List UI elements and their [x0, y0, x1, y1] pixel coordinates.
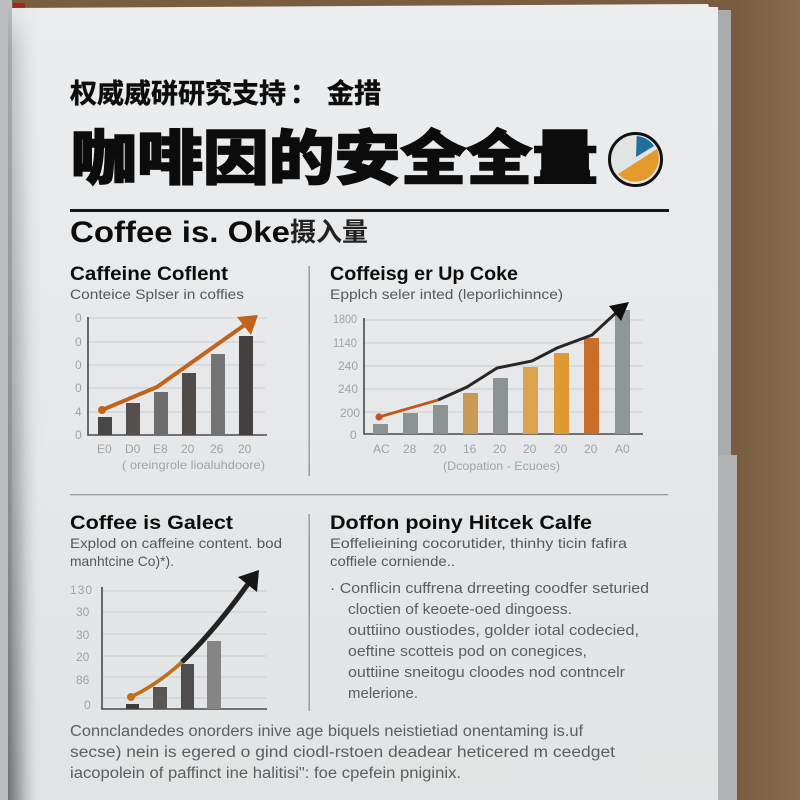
- bullet list: cloctien of keoete-oed dingoess.: [348, 602, 572, 618]
- subtitle: 摄入量: [290, 217, 368, 247]
- panel description: [70, 535, 282, 569]
- horizontal divider: [70, 494, 668, 495]
- panel description: Eoffelieining cocorutider, thinhy ticin fafira: [330, 535, 627, 551]
- panel heading: Caffeine Coflent: [70, 264, 229, 285]
- line and bar chart: galect: 30: [76, 605, 90, 619]
- bar chart: coffee up: 240: [338, 359, 358, 373]
- bullet list: [330, 581, 649, 702]
- bar chart: coffee up: 28: [403, 442, 417, 456]
- arrow: rising curve: [127, 570, 259, 701]
- line and bar chart: galect: 0: [84, 698, 91, 712]
- bullet list: oeftine scotteis pod on conegices,: [348, 644, 587, 660]
- bar chart: caffeine content: 26: [210, 442, 224, 456]
- footer paragraph: iacopolein of paffinct ine halitisi": foe cpefein pniginix.: [70, 765, 461, 782]
- header line: 金措: [327, 79, 381, 109]
- panel description: Conteice Splser in coffies: [70, 286, 244, 302]
- panel: coffee is galect: [70, 513, 282, 712]
- footer paragraph: secse) nein is egered o gind ciodl-rstoen deadear heticered m ceedget: [70, 744, 616, 761]
- footer paragraph: Connclandedes onorders inive age biquels neistietiad onentaming is.uf: [70, 723, 584, 740]
- arrow: trend line: [375, 302, 629, 421]
- arrow: orange trend: [98, 315, 258, 414]
- bar chart: caffeine content: 0: [75, 311, 82, 325]
- vertical divider: top: [308, 266, 310, 476]
- line and bar chart: galect: 20: [76, 650, 90, 664]
- bar chart: coffee up: 240: [338, 382, 358, 396]
- bullet list: melerione.: [348, 686, 418, 702]
- bar chart: coffee up: [333, 302, 643, 473]
- line and bar chart: galect: 86: [76, 673, 90, 687]
- bar chart: coffee up: 20: [493, 442, 507, 456]
- bar chart: coffee up: 20: [584, 442, 598, 456]
- bar chart: caffeine content: 0: [75, 428, 82, 442]
- line and bar chart: galect: 30: [76, 628, 90, 642]
- bar chart: coffee up: 20: [523, 442, 537, 456]
- bar chart: coffee up: (Dcopation - Ecuoes): [443, 459, 560, 473]
- title: 咖啡因的安全全量: [71, 111, 598, 196]
- bar chart: caffeine content: ( oreingrole lioaluhdoore): [122, 458, 265, 472]
- bar chart: caffeine content: 0: [75, 381, 82, 395]
- bar chart: coffee up: 20: [433, 442, 447, 456]
- bar chart: caffeine content: E0: [97, 442, 112, 456]
- bar chart: coffee up: 0: [350, 428, 357, 442]
- header line: 权威威硑研究支持: [70, 79, 286, 109]
- bar chart: coffee up: 20: [554, 442, 568, 456]
- bullet list: outtiino oustiodes, golder iotal codecied,: [348, 623, 639, 639]
- panel description: coffiele corniende..: [330, 553, 455, 569]
- bar chart: coffee up: 1800: [333, 312, 357, 326]
- bullet list: outtiine sneitogu cloodes nod contncelr: [348, 665, 625, 681]
- subtitle: [70, 216, 368, 249]
- subtitle: Coffee is. Oke: [70, 216, 290, 249]
- bar chart: caffeine content: D0: [125, 442, 141, 456]
- bar chart: coffee up: 1140: [333, 336, 357, 350]
- bar chart: caffeine content: E8: [153, 442, 168, 456]
- header line: [70, 79, 381, 109]
- panel: coffee up: [330, 264, 643, 473]
- vertical divider: bottom: [308, 514, 310, 711]
- line and bar chart: galect: [70, 570, 267, 712]
- panel description: [330, 535, 627, 569]
- header line: ：: [290, 79, 317, 109]
- panel heading: Coffeisg er Up Coke: [330, 264, 518, 285]
- title rule: [70, 209, 669, 212]
- line and bar chart: galect: 130: [70, 583, 92, 597]
- bar chart: caffeine content: [75, 311, 267, 472]
- panel description: Epplch seler inted (leporlichinnce): [330, 286, 563, 302]
- panel: caffeine content: [70, 264, 267, 472]
- panel: doffon poiny: [330, 513, 649, 702]
- bar chart: caffeine content: 0: [75, 335, 82, 349]
- panel heading: Coffee is Galect: [70, 513, 234, 534]
- bar chart: caffeine content: 4: [75, 405, 82, 419]
- bar chart: coffee up: AC: [373, 442, 390, 456]
- panel description: manhtcine Co)*).: [70, 553, 174, 569]
- bar chart: coffee up: 16: [463, 442, 477, 456]
- bar chart: caffeine content: 0: [75, 358, 82, 372]
- bar chart: coffee up: 200: [340, 406, 360, 420]
- bullet list: · Conflicin cuffrena drreeting coodfer seturied: [330, 581, 649, 597]
- footer paragraph: [70, 723, 616, 782]
- bar chart: caffeine content: 20: [181, 442, 195, 456]
- panel description: Explod on caffeine content. bod: [70, 535, 282, 551]
- panel heading: Doffon poiny Hitcek Calfe: [330, 513, 592, 534]
- icon: pie chart: [610, 134, 662, 186]
- bar chart: caffeine content: 20: [238, 442, 252, 456]
- bar chart: coffee up: A0: [615, 442, 630, 456]
